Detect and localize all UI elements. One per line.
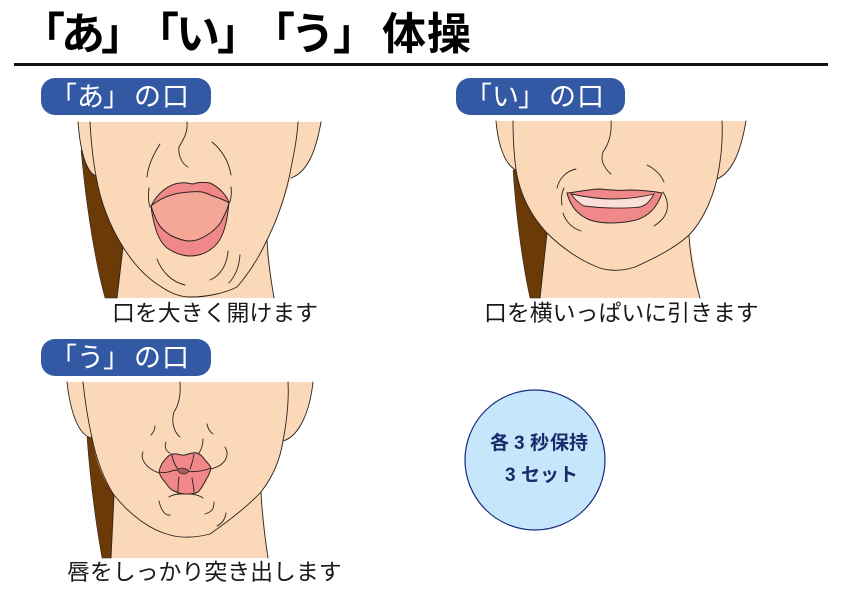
caption: 唇をしっかり突き出します xyxy=(67,559,342,585)
label: う xyxy=(41,339,211,376)
mouth xyxy=(151,182,229,256)
label: い xyxy=(456,78,625,115)
panel: い mouth xyxy=(456,78,759,326)
label: い: 「い」の口 xyxy=(465,82,604,112)
title: 「あ」「い」「う」体操 xyxy=(21,10,471,59)
caption: 口を横いっぱいに引きます xyxy=(484,300,759,326)
title xyxy=(14,10,828,66)
label: あ xyxy=(41,78,211,115)
callout: hold 3 seconds, 3 sets: 各3秒保持 xyxy=(490,431,588,454)
illustration: face with lips pushed forward xyxy=(67,382,313,558)
label: あ: 「あ」の口 xyxy=(50,82,189,112)
illustration: face with mouth wide open xyxy=(78,122,321,298)
panel: あ mouth xyxy=(41,78,321,326)
callout: hold 3 seconds, 3 sets xyxy=(465,390,605,530)
mouth xyxy=(567,189,662,223)
mouth xyxy=(159,453,211,494)
illustration: face with mouth stretched sideways xyxy=(496,121,746,298)
callout: hold 3 seconds, 3 sets: 3セット xyxy=(505,465,578,486)
panel: う mouth xyxy=(41,339,342,585)
label: う: 「う」の口 xyxy=(50,343,189,373)
caption: 口を大きく開けます xyxy=(112,300,318,326)
